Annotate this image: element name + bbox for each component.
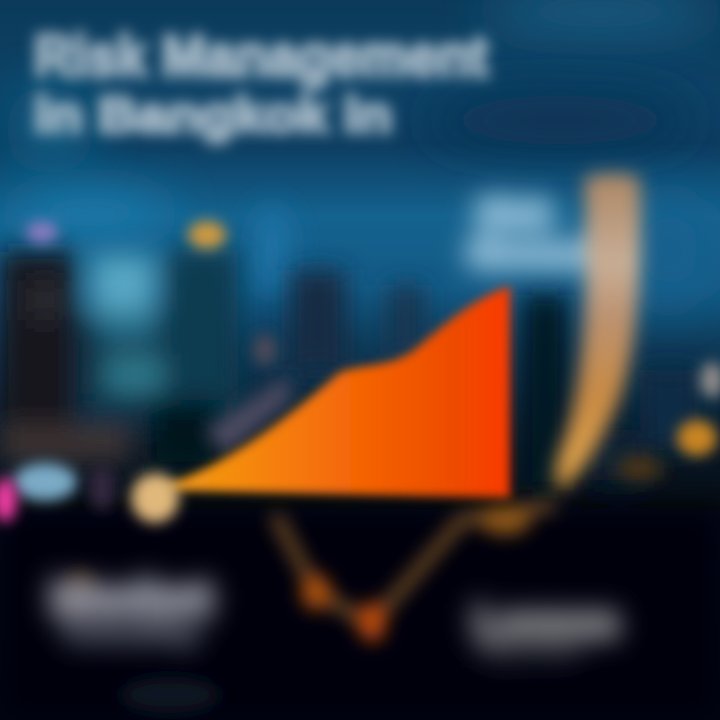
label: upper right: Growth: [468, 233, 618, 275]
label: lower right: [474, 598, 618, 665]
title: [34, 24, 488, 143]
label: lower left: [52, 574, 210, 648]
title: in Bangkok in: [34, 87, 392, 143]
label: lower right: Exposure: [480, 643, 580, 665]
chart: descending v-shaped line: [275, 505, 555, 642]
label: upper right: [468, 193, 618, 275]
label: lower left: Volatility: [62, 621, 201, 648]
label: lower right: Losses: [474, 598, 618, 645]
skyline: city buildings: [0, 250, 720, 720]
label: upper right: Risk: [478, 193, 551, 234]
title: Risk Management: [34, 24, 488, 89]
arrow: curved rising band: [555, 173, 641, 492]
city lights: [0, 221, 720, 713]
label: lower left: Market: [52, 574, 210, 621]
chart: rising orange area: [131, 286, 510, 523]
